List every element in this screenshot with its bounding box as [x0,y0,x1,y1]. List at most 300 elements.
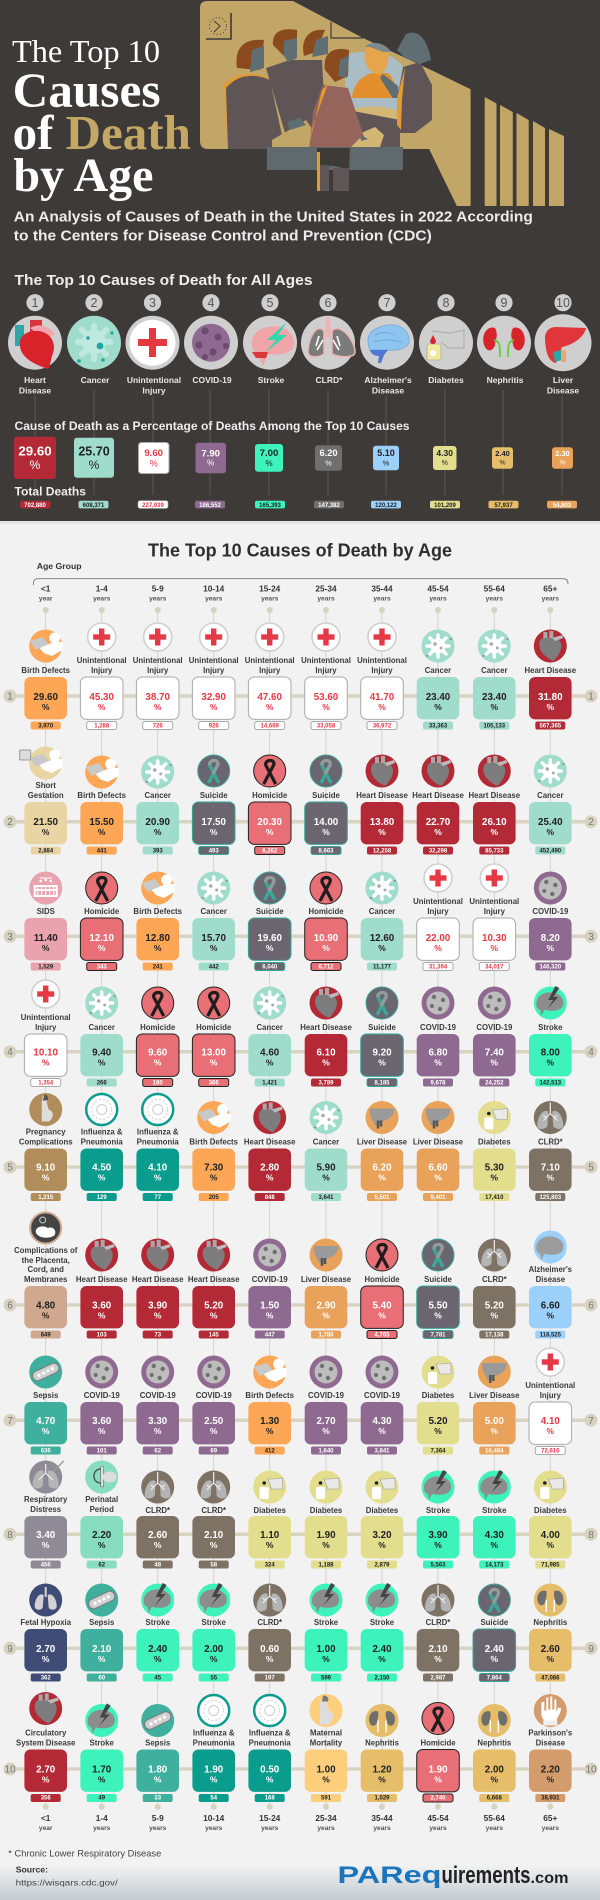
row 4 cell: 10-14 homicide [192,987,235,1087]
row 2 cell: 5-9 cancer [136,756,179,855]
row 1 cell: 1-4 unintentional injury [77,623,127,730]
row 7 cell: 55-64 liver disease: Liver Disease [469,1391,520,1400]
row 3 cell: 15-24 suicide [248,872,291,971]
row 10 cell: <1 circulatory system disease: Circulatory [25,1728,67,1738]
row 7 cell: 25-34 covid-19: COVID-19 [308,1391,345,1400]
age headers: top: years [93,596,111,603]
age headers: top: 1-4 [96,584,108,594]
row 5 cell: 65+ clrd: 125,803 [539,1195,562,1201]
row 4 cell: 15-24 cancer [248,986,291,1087]
row 1 cell: 15-24 unintentional injury: Unintentional [245,656,295,665]
row 9 cell: 10-14 stroke: % [210,1654,218,1664]
row 7 cell: 45-54 diabetes: Diabetes [422,1391,455,1400]
age headers: top: years [149,596,167,603]
row 5 cell: 25-34 cancer: 3,641 [318,1195,334,1201]
row 9 cell: 35-44 stroke: 2.40 [372,1644,392,1655]
row 3 cell: 45-54 unintentional injury: 31,394 [429,965,448,971]
row 9 cell: 15-24 clrd [248,1584,291,1682]
row 4 cell: 10-14 homicide: 366 [209,1081,219,1087]
total deaths pills: 57,937 [494,503,513,509]
percentage chart: proportional boxes: % [325,458,332,468]
total deaths pills: 227,039 [142,503,164,509]
cause 7: alzheimer's disease [360,294,414,396]
row 8 cell: 10-14 clrd: CLRD* [201,1506,227,1515]
age headers: top: years [373,596,391,603]
row 6 cell: 55-64 clrd: 5.20 [485,1300,504,1312]
row 7 cell: 5-9 covid-19 [136,1356,179,1455]
row 3 cell: <1 sids: 11.40 [34,933,58,944]
row 5 cell: 25-34 cancer: % [322,1172,330,1182]
row 2 cell: 5-9 cancer: Cancer [144,791,171,800]
cause 3: unintentional injury: Injury [142,386,166,396]
rank badges: left and right: 8 [7,1530,13,1541]
row 7 cell: <1 sepsis: % [42,1426,50,1436]
row 7 cell: 25-34 covid-19: 2.70 [316,1416,336,1427]
title: Causes [13,63,161,118]
cause 9: nephritis: 9 [501,296,508,310]
row 3 cell: 15-24 suicide: 6,040 [262,965,278,971]
row 6 cell: 65+ alzheimer's disease: 6.60 [541,1300,560,1312]
logo: uirements [442,1862,530,1889]
row 5 cell: 15-24 heart disease: 848 [265,1195,275,1201]
row 9 cell: 25-34 stroke: % [322,1654,330,1664]
row 5 cell: 55-64 diabetes: 17,410 [485,1195,504,1201]
subtitle: to the Centers for Disease Control and Prevention (CDC) [14,228,432,244]
row 9 cell: 55-64 suicide: 2.40 [485,1644,504,1655]
row 3 cell: 10-14 cancer: 15.70 [201,933,227,944]
row 4 cell: 1-4 cancer: Cancer [88,1023,115,1032]
row 4 cell: <1 unintentional injury: Injury [35,1023,57,1032]
row 9 cell: 25-34 stroke: Stroke [314,1618,339,1627]
row 9 cell: <1 fetal hypoxia: % [42,1654,50,1664]
row 1 cell: 65+ heart disease: Heart Disease [525,666,577,675]
row 3 cell: 35-44 cancer: Cancer [369,907,395,916]
row 7 cell: 15-24 birth defects: Birth Defects [245,1391,295,1400]
row 9 cell: 10-14 stroke: 2.00 [204,1644,224,1655]
percentage chart: proportional boxes: % [30,458,41,472]
row 4 cell: 55-64 covid-19: % [491,1058,499,1068]
row 4 cell: 5-9 homicide: Homicide [140,1023,176,1032]
percentage chart: proportional boxes: % [89,458,100,472]
row 6 cell: <1 placenta complications: Complications of [14,1246,78,1255]
row 1 cell: 35-44 unintentional injury: Unintentional [357,656,407,665]
percentage chart: proportional boxes: % [442,460,448,467]
row 3 cell: 5-9 birth defects: Birth Defects [133,907,183,916]
row 3 cell: 5-9 birth defects: % [154,943,162,953]
row 4 cell: 65+ stroke: Stroke [538,1023,563,1032]
row 5 cell: <1 pregnancy complications: 1,215 [38,1195,54,1201]
band under the header [0,521,600,524]
row 8 cell: 55-64 stroke: Stroke [482,1506,507,1515]
row 4 cell: 10-14 homicide: Homicide [196,1023,232,1032]
row 7 cell: 55-64 liver disease [469,1356,520,1455]
row 1 cell: 1-4 unintentional injury: 45.30 [89,692,115,703]
row 5 cell: 65+ clrd: CLRD* [538,1138,564,1146]
row 10 cell: 45-54 homicide [417,1702,459,1802]
source: https://wisqars.cdc.gov/ [16,1878,118,1888]
row 8 cell: 55-64 stroke: 14,173 [485,1563,504,1569]
row 5 cell: 55-64 diabetes: Diabetes [478,1138,511,1146]
rank badges: left and right: 8 [588,1530,594,1541]
row 6 cell: 1-4 heart disease [76,1238,128,1339]
row 6 cell: 10-14 heart disease: 5.20 [204,1300,224,1312]
row 2 cell: 1-4 birth defects: % [98,827,106,837]
age headers: bottom: <1 [41,1813,51,1823]
row 8 cell: 1-4 perinatal period: 62 [98,1563,106,1569]
row 9 cell: 45-54 clrd: 2.10 [428,1644,448,1655]
rank badges: left and right: 4 [588,1047,594,1058]
row 8 cell: 5-9 clrd: 2.60 [148,1530,168,1541]
row 4 cell: <1 unintentional injury: % [42,1058,50,1068]
age headers: bottom: 1-4 [96,1813,108,1823]
row 8 cell: 65+ diabetes: Diabetes [534,1506,567,1515]
row 5 cell: 10-14 birth defects: Birth Defects [189,1138,239,1146]
cause 5: stroke [243,294,297,385]
row 4 cell: 25-34 heart disease [300,986,352,1087]
row 3 cell: 65+ covid-19: 8.20 [541,933,560,944]
row 1 cell: 5-9 unintentional injury [133,623,183,730]
row 8 cell: 35-44 diabetes: % [378,1540,386,1550]
row 6 cell: 65+ alzheimer's disease: % [547,1310,555,1320]
footnote: * Chronic Lower Respiratory Disease [8,1848,161,1860]
row 1 cell: 65+ heart disease [525,630,577,730]
age headers: top: 15-24 [259,584,281,594]
row 10 cell: 5-9 sepsis: % [154,1774,162,1784]
row 1 cell: <1 birth defects: 3,970 [38,724,54,730]
row 6 cell: 25-34 liver disease [301,1238,352,1339]
row 8 cell: 45-54 stroke: % [434,1540,442,1550]
row 6 cell: 5-9 heart disease: 73 [154,1333,162,1339]
age headers: top: 5-9 [152,584,164,594]
row 6 cell: 45-54 suicide: % [434,1310,442,1320]
heading: causes by age: The Top 10 Causes of Death by Age [148,541,452,561]
row 2 cell: 1-4 birth defects: 441 [97,849,107,855]
total deaths pills [20,501,577,509]
total deaths pills: 120,122 [375,503,398,509]
row 5 cell: 5-9 influenza and pneumonia: Pneumonia [137,1138,179,1146]
row 1 cell: 15-24 unintentional injury: Injury [259,666,281,675]
row 2 cell: 15-24 homicide: 20.30 [257,817,283,828]
row 8 cell: <1 respiratory distress: Respiratory [24,1495,68,1504]
row 7 cell: 35-44 covid-19 [361,1356,403,1455]
row 10 cell: 1-4 stroke: 1.70 [92,1764,112,1776]
row 5 cell: 15-24 heart disease: % [266,1172,274,1182]
row 7 cell: 45-54 diabetes: 5.20 [428,1416,448,1427]
row 4 cell: 25-34 heart disease: 6.10 [316,1048,336,1058]
row 1 cell: 5-9 unintentional injury: % [154,702,162,712]
cause 2: cancer: Cancer [81,375,110,385]
row 3 cell: 55-64 unintentional injury: Injury [484,907,506,916]
row 1 cell: 10-14 unintentional injury: 926 [209,724,219,730]
cause 7: alzheimer's disease: Alzheimer's [364,375,412,385]
row 3 cell: 10-14 cancer: Cancer [200,907,227,916]
row 9 cell: 55-64 suicide: 7,864 [487,1676,502,1682]
row 4 cell: 35-44 suicide: 9.20 [372,1048,392,1058]
row 9 cell: 25-34 stroke [305,1583,347,1682]
rank badges: left and right: 3 [588,932,594,943]
row 1 cell: 45-54 cancer: % [434,702,442,712]
row 7 cell: 10-14 covid-19: COVID-19 [196,1391,232,1400]
row 9 cell: 1-4 sepsis: 2.10 [92,1644,112,1655]
row 3 cell: 35-44 cancer: 11,177 [373,965,392,971]
row 1 cell: <1 birth defects [21,630,71,730]
cause 8: diabetes: 8 [443,296,450,310]
row 8 cell: 45-54 stroke: 5,563 [430,1563,446,1569]
row 8 cell: 15-24 diabetes [248,1470,291,1569]
row 6 cell: 1-4 heart disease: Heart Disease [76,1275,128,1284]
age headers: bottom: 35-44 [371,1813,393,1823]
row 4 cell: 5-9 homicide: 9.60 [148,1048,168,1058]
row 3 cell: 15-24 suicide: 19.60 [257,933,283,944]
row 10 cell: 65+ parkinson's disease: Disease [536,1738,566,1748]
row 7 cell: 55-64 liver disease: 5.00 [485,1416,504,1427]
row 10 cell: 10-14 influenza and pneumonia [192,1695,235,1802]
row 5 cell: 1-4 influenza and pneumonia: 4.50 [92,1162,112,1174]
cause 6: clrd: 6 [325,296,332,310]
row 6 cell: 10-14 heart disease: Heart Disease [188,1275,240,1284]
row 5 cell: 1-4 influenza and pneumonia: Pneumonia [81,1138,123,1146]
row 1 cell: 5-9 unintentional injury: 38.70 [145,692,171,703]
row 6 cell: 1-4 heart disease: 103 [97,1333,107,1339]
row 2 cell: 55-64 heart disease [469,754,521,855]
row 3 cell: 45-54 unintentional injury: 22.00 [426,933,451,944]
row 7 cell: 55-64 liver disease: 16,484 [485,1449,504,1455]
row 9 cell: 5-9 stroke: Stroke [146,1618,170,1627]
row 1 cell: 55-64 cancer: % [491,702,499,712]
row 8 cell: 35-44 diabetes: 2,879 [374,1563,390,1569]
row 8 cell: 55-64 stroke [473,1470,516,1569]
row 6 cell: 10-14 heart disease: % [210,1310,218,1320]
age headers: top: 65+ [543,584,557,594]
row 9 cell: 55-64 suicide [473,1584,516,1682]
row 9 cell: 45-54 clrd: CLRD* [426,1618,451,1627]
age headers: top: 45-54 [427,584,449,594]
row 7 cell: <1 sepsis: 4.70 [36,1416,56,1427]
row 6 cell: <1 placenta complications: Membranes [24,1275,68,1284]
row 3 cell: 55-64 unintentional injury: % [491,943,499,953]
row 2 cell: 1-4 birth defects: 15.50 [89,817,115,828]
source: Source: [16,1864,48,1874]
cause 9: nephritis: Nephritis [487,375,524,385]
row 7 cell: 5-9 covid-19: % [154,1426,162,1436]
row 9 cell: 5-9 stroke: 45 [154,1676,162,1682]
row 10 cell: 25-34 maternal mortality: 1.00 [316,1764,336,1776]
row 5 cell: <1 pregnancy complications: Pregnancy [26,1128,66,1136]
row 7 cell: 15-24 birth defects: 412 [265,1449,275,1455]
row 8 cell: 15-24 diabetes: 324 [265,1563,275,1569]
row 10 cell: 5-9 sepsis: 33 [154,1796,162,1802]
row 5 cell: 15-24 heart disease: 2.80 [260,1162,280,1174]
row 5 cell: 65+ clrd: 7.10 [541,1162,560,1174]
rank badges: left and right: 1 [588,692,594,702]
row 10 cell: 15-24 influenza and pneumonia: 0.50 [260,1764,280,1776]
row 1 cell: 25-34 unintentional injury [301,623,351,730]
row 1 cell: 15-24 unintentional injury: 47.60 [257,692,283,703]
row 6 cell: 15-24 covid-19: 1.50 [260,1300,280,1312]
age headers: bottom: 65+ [543,1813,557,1823]
row 4 cell: 45-54 covid-19: 9,678 [430,1081,446,1087]
age headers: top: years [429,596,447,603]
row 5 cell: 65+ clrd: % [547,1172,555,1182]
row 8 cell: 25-34 diabetes: % [322,1540,330,1550]
row 1 cell: 45-54 cancer: 23.40 [426,692,451,703]
row 9 cell: 65+ nephritis: 2.60 [541,1644,560,1655]
row 7 cell: 55-64 liver disease: % [491,1426,499,1436]
row 2 cell: 15-24 homicide: % [266,827,274,837]
row 5 cell: 35-44 liver disease [357,1101,408,1201]
row 1 cell: 55-64 cancer: Cancer [481,666,508,675]
cause 3: unintentional injury [126,294,181,396]
row 1 cell: 35-44 unintentional injury: % [378,702,386,712]
row 1 cell: 15-24 unintentional injury [245,623,295,730]
row 3 cell: 65+ covid-19: COVID-19 [532,907,569,916]
row 2 cell: 55-64 heart disease: Heart Disease [469,791,521,800]
row 10 cell: 15-24 influenza and pneumonia [248,1695,291,1802]
row 4 cell: 35-44 suicide [361,987,403,1087]
row 8 cell: 45-54 stroke [417,1470,459,1569]
rank badges: left and right [4,690,598,1776]
row 5 cell: 55-64 diabetes [473,1101,516,1201]
row 4 cell: 1-4 cancer [80,986,123,1087]
row 3 cell: 65+ covid-19: % [547,943,555,953]
row 4 cell: 25-34 heart disease: 3,789 [318,1081,334,1087]
row 7 cell: 25-34 covid-19 [305,1356,347,1455]
row 10 cell: <1 circulatory system disease: System Disease [16,1738,76,1748]
row 3 cell: 10-14 cancer: % [210,943,218,953]
cause 1: heart disease [8,294,62,396]
row 7 cell: 10-14 covid-19: 69 [210,1449,218,1455]
row 10 cell: 15-24 influenza and pneumonia: Influenza & [249,1728,291,1738]
row 3 cell: 1-4 homicide: Homicide [84,907,120,916]
row 6 cell: 15-24 covid-19 [248,1238,291,1339]
row 4 cell: 45-54 covid-19: 6.80 [428,1048,448,1058]
row 8 cell: 1-4 perinatal period: Perinatal [85,1495,118,1504]
total deaths pills: 54,803 [553,503,572,509]
row 3 cell: 10-14 cancer [192,872,235,971]
row 6 cell: 15-24 covid-19: 447 [265,1333,275,1339]
cause 2: cancer [67,294,121,385]
percentage chart: proportional boxes: 2.30 [555,449,570,458]
row 8 cell: 1-4 perinatal period: Period [90,1505,114,1514]
row 10 cell: 45-54 homicide: % [434,1774,442,1784]
row 2 cell: 35-44 heart disease [356,754,408,855]
row 9 cell: 25-34 stroke: 599 [321,1676,332,1682]
row 10 cell: 65+ parkinson's disease: % [547,1774,555,1784]
row 10 cell: 35-44 nephritis: % [378,1774,386,1784]
row 8 cell: 65+ diabetes: 4.00 [541,1530,560,1541]
row 9 cell: 55-64 suicide: % [491,1654,499,1664]
row 8 cell: 5-9 clrd: 48 [154,1563,162,1569]
row 9 cell: 45-54 clrd: 2,987 [430,1676,446,1682]
row 7 cell: 5-9 covid-19: 3.30 [148,1416,168,1427]
row 1 cell: 10-14 unintentional injury [189,623,239,730]
row 7 cell: 65+ unintentional injury: % [547,1426,555,1436]
row 9 cell: 5-9 stroke [136,1583,179,1682]
row 7 cell: 10-14 covid-19: % [210,1426,218,1436]
row 6 cell: 35-44 homicide: 4,765 [374,1333,390,1339]
row 10 cell: 1-4 stroke: % [98,1774,106,1784]
row 1 cell: 25-34 unintentional injury: 53.60 [314,692,339,703]
age headers: bottom: years [542,1825,559,1832]
row 6 cell: 35-44 homicide [361,1239,403,1339]
row 2 cell: 45-54 heart disease: Heart Disease [412,791,464,800]
age group bracket [34,579,568,585]
row 7 cell: 45-54 diabetes: 7,364 [430,1449,446,1455]
row 4 cell: 25-34 heart disease: % [322,1058,330,1068]
row 8 cell: 25-34 diabetes: 1.90 [316,1530,336,1541]
row 7 cell: 15-24 birth defects: % [266,1426,274,1436]
row 1 cell: 35-44 unintentional injury [357,623,407,730]
row 3 cell: 65+ covid-19: 146,320 [539,965,562,971]
row 1 cell: 25-34 unintentional injury: Unintentional [301,656,351,665]
row 3 cell: 55-64 unintentional injury: 34,017 [485,965,504,971]
percentage chart: proportional boxes: 5.10 [377,448,395,458]
row 2 cell: 5-9 cancer: 393 [153,849,163,855]
row 8 cell: 1-4 perinatal period: 2.20 [92,1530,112,1541]
age headers: bottom: 15-24 [259,1813,281,1823]
logo: PAReq [338,1862,442,1889]
row 5 cell: 5-9 influenza and pneumonia: % [154,1172,162,1182]
age group label: Age Group [37,561,82,571]
rank badges: left and right: 2 [7,817,13,828]
age headers: top: 25-34 [315,584,337,594]
row 10 cell: 65+ parkinson's disease: Parkinson's [528,1728,573,1738]
row 7 cell: 25-34 covid-19: % [322,1426,330,1436]
row 4 cell: 65+ stroke [529,986,572,1087]
row 8 cell: 5-9 clrd [136,1470,179,1569]
row 2 cell: 65+ cancer: 25.40 [538,817,563,828]
row 9 cell: 15-24 clrd: 197 [265,1676,275,1682]
footer gradient [0,1865,600,1900]
row 2 cell: 25-34 suicide: 14.00 [314,817,339,828]
row 4 cell: 10-14 homicide: % [210,1058,218,1068]
row 10 cell: <1 circulatory system disease [16,1692,76,1802]
rank badges: left and right: 7 [7,1416,13,1427]
row 5 cell: 55-64 diabetes: 5.30 [485,1162,504,1174]
row 8 cell: 15-24 diabetes: % [266,1540,274,1550]
age headers: bottom: years [429,1825,447,1832]
row 2 cell: 45-54 heart disease [412,754,464,855]
cause 10: liver disease [534,294,592,396]
row 2 cell: 55-64 heart disease: % [491,827,499,837]
cause 6: clrd [301,294,355,385]
row 4 cell: 55-64 covid-19: COVID-19 [476,1023,513,1032]
row 3 cell: 15-24 suicide: % [266,943,274,953]
row 4 cell: 35-44 suicide: % [378,1058,386,1068]
row 5 cell: 25-34 cancer [305,1101,347,1201]
connector lines for all-ages columns [35,390,562,495]
row 1 cell: 1-4 unintentional injury: Unintentional [77,656,127,665]
row 4 cell: 45-54 covid-19: COVID-19 [420,1023,457,1032]
row 2 cell: 45-54 heart disease: 32,298 [429,849,448,855]
row 1 cell: 65+ heart disease: % [547,702,555,712]
row 3 cell: 45-54 unintentional injury: % [434,943,442,953]
row 1 cell: 15-24 unintentional injury: % [266,702,274,712]
row 3 cell: 65+ covid-19 [529,872,572,971]
age headers: top: years [317,596,335,603]
percentage chart: proportional boxes: 4.30 [436,448,453,458]
row 7 cell: 35-44 covid-19: COVID-19 [364,1391,401,1400]
row 6 cell: 15-24 covid-19: COVID-19 [252,1275,288,1284]
row 1 cell: 55-64 cancer: 23.40 [482,692,507,703]
row 6 cell: 25-34 liver disease: 2.90 [316,1300,336,1312]
age headers: top [39,584,559,613]
row 9 cell: <1 fetal hypoxia: 362 [41,1676,51,1682]
row 9 cell: 10-14 stroke: 55 [210,1676,218,1682]
row 5 cell: 1-4 influenza and pneumonia: 129 [97,1195,107,1201]
illustration: family around a hospital bed [200,1,564,206]
row 1 cell: <1 birth defects: % [42,702,50,712]
